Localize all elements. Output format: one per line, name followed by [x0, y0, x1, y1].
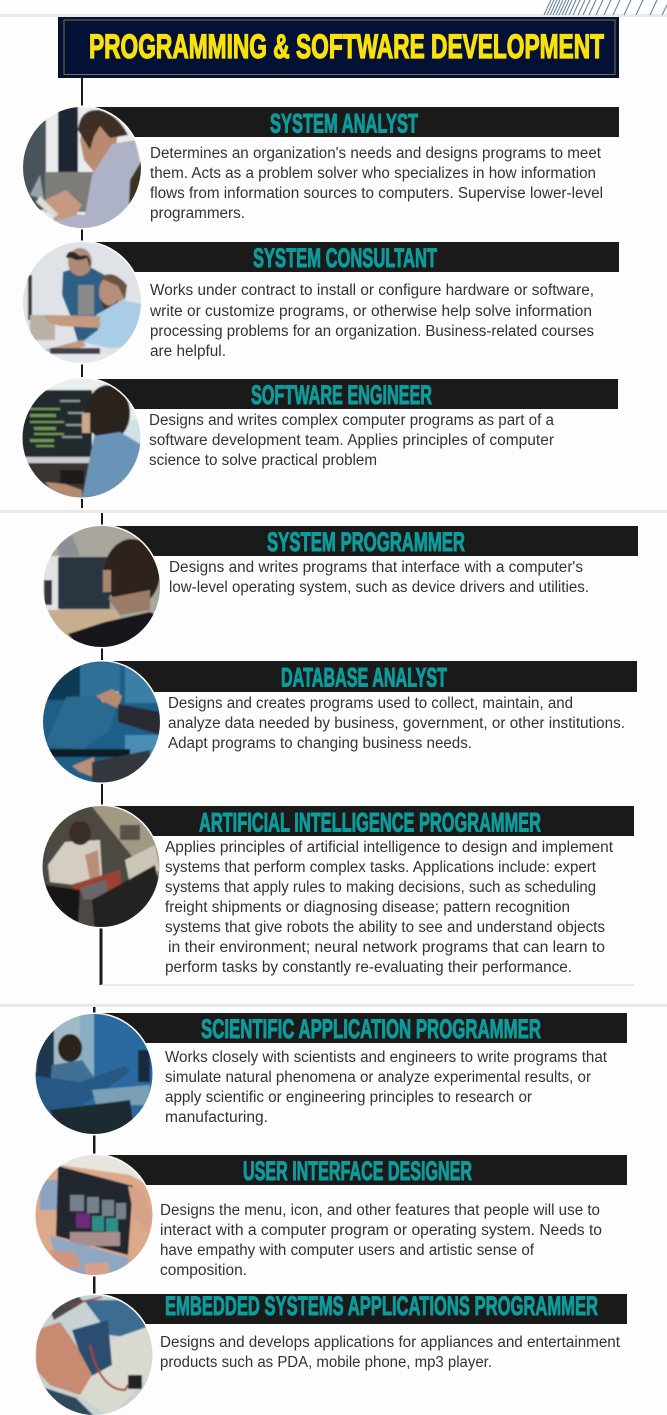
description [160, 1202, 602, 1279]
panel: artificial intelligence programmer [40, 804, 634, 986]
photo: scientists at screen [33, 1012, 158, 1137]
description: Works under contract to install or configure hardware or software, [150, 282, 594, 299]
description: in their environment; neural network programs that can learn to [168, 939, 605, 956]
panel: system consultant [20, 240, 619, 366]
photo: hand on breadboard [33, 1293, 158, 1415]
description: systems that give robots the ability to see and understand objects [165, 919, 605, 936]
description: composition. [160, 1262, 247, 1279]
description: flows from information sources to computers. Supervise lower-level [150, 185, 603, 202]
heading: USER INTERFACE DESIGNER [243, 1156, 472, 1186]
description [160, 1334, 621, 1371]
photo: server rack [43, 660, 160, 784]
photo: analyst with tablet [20, 105, 145, 230]
heading: SYSTEM CONSULTANT [253, 243, 437, 273]
description: Designs and writes programs that interface with a computer's [169, 559, 583, 576]
description [165, 1049, 608, 1126]
description: Designs the menu, icon, and other features that people will use to [160, 1202, 600, 1219]
description: Designs and writes complex computer programs as part of a [149, 412, 554, 429]
description [165, 839, 614, 976]
photo: overhead view of programmer [40, 804, 165, 930]
panel: software engineer [20, 377, 618, 499]
description: Works closely with scientists and engineers to write programs that [165, 1049, 608, 1066]
connector lines [81, 78, 103, 1295]
panel: embedded systems applications programmer [33, 1291, 627, 1415]
description: freight shipments or diagnosing disease; pattern recognition [165, 899, 570, 916]
description [168, 695, 625, 752]
panel: system analyst [20, 105, 619, 230]
photo: two consultants [20, 240, 145, 366]
description [149, 412, 554, 469]
description: systems that apply rules to making decisions, such as scheduling [165, 879, 596, 896]
description: are helpful. [150, 343, 226, 360]
description: low-level operating system, such as device drivers and utilities. [169, 579, 589, 596]
description [150, 145, 603, 222]
description: simulate natural phenomena or analyze experimental results, or [165, 1069, 591, 1086]
hatch decoration [544, 0, 667, 15]
description: Adapt programs to changing business needs. [168, 735, 472, 752]
panel: database analyst [40, 660, 637, 790]
heading: SYSTEM ANALYST [270, 108, 418, 138]
description: Designs and creates programs used to collect, maintain, and [168, 695, 573, 712]
description: products such as PDA, mobile phone, mp3 player. [160, 1354, 492, 1371]
description: write or customize programs, or otherwise help solve information [149, 303, 592, 320]
description: Determines an organization's needs and designs programs to meet [150, 145, 602, 162]
heading: SYSTEM PROGRAMMER [267, 527, 465, 557]
description: Applies principles of artificial intelligence to design and implement [165, 839, 614, 856]
description: have empathy with computer users and artistic sense of [160, 1242, 535, 1259]
description: systems that perform complex tasks. Applications include: expert [165, 859, 597, 876]
description [149, 282, 594, 360]
description: programmers. [150, 205, 245, 222]
description [169, 559, 589, 596]
section dividers [0, 14, 667, 1007]
description: Designs and develops applications for appliances and entertainment [160, 1334, 621, 1351]
description: interact with a computer program or operating system. Needs to [160, 1222, 602, 1239]
description: them. Acts as a problem solver who specializes in how information [150, 165, 596, 182]
photo: engineer at code monitor [20, 377, 145, 499]
panel: system programmer [40, 524, 638, 650]
panel: scientific application programmer [33, 1012, 627, 1137]
description: manufacturing. [165, 1109, 268, 1126]
description: apply scientific or engineering principles to research or [165, 1089, 532, 1106]
description: analyze data needed by business, government, or other institutions. [168, 715, 625, 732]
heading: SOFTWARE ENGINEER [251, 380, 432, 410]
photo: laptop with tiles [33, 1153, 158, 1278]
photo: programmer from behind [40, 524, 165, 650]
panel: user interface designer [33, 1153, 627, 1279]
description: science to solve practical problem [149, 452, 377, 469]
title banner [58, 17, 619, 78]
description: processing problems for an organization. Business-related courses [150, 323, 594, 340]
heading: DATABASE ANALYST [281, 662, 447, 692]
description: software development team. Applies principles of computer [149, 432, 554, 449]
description: perform tasks by constantly re-evaluating their performance. [165, 959, 572, 976]
